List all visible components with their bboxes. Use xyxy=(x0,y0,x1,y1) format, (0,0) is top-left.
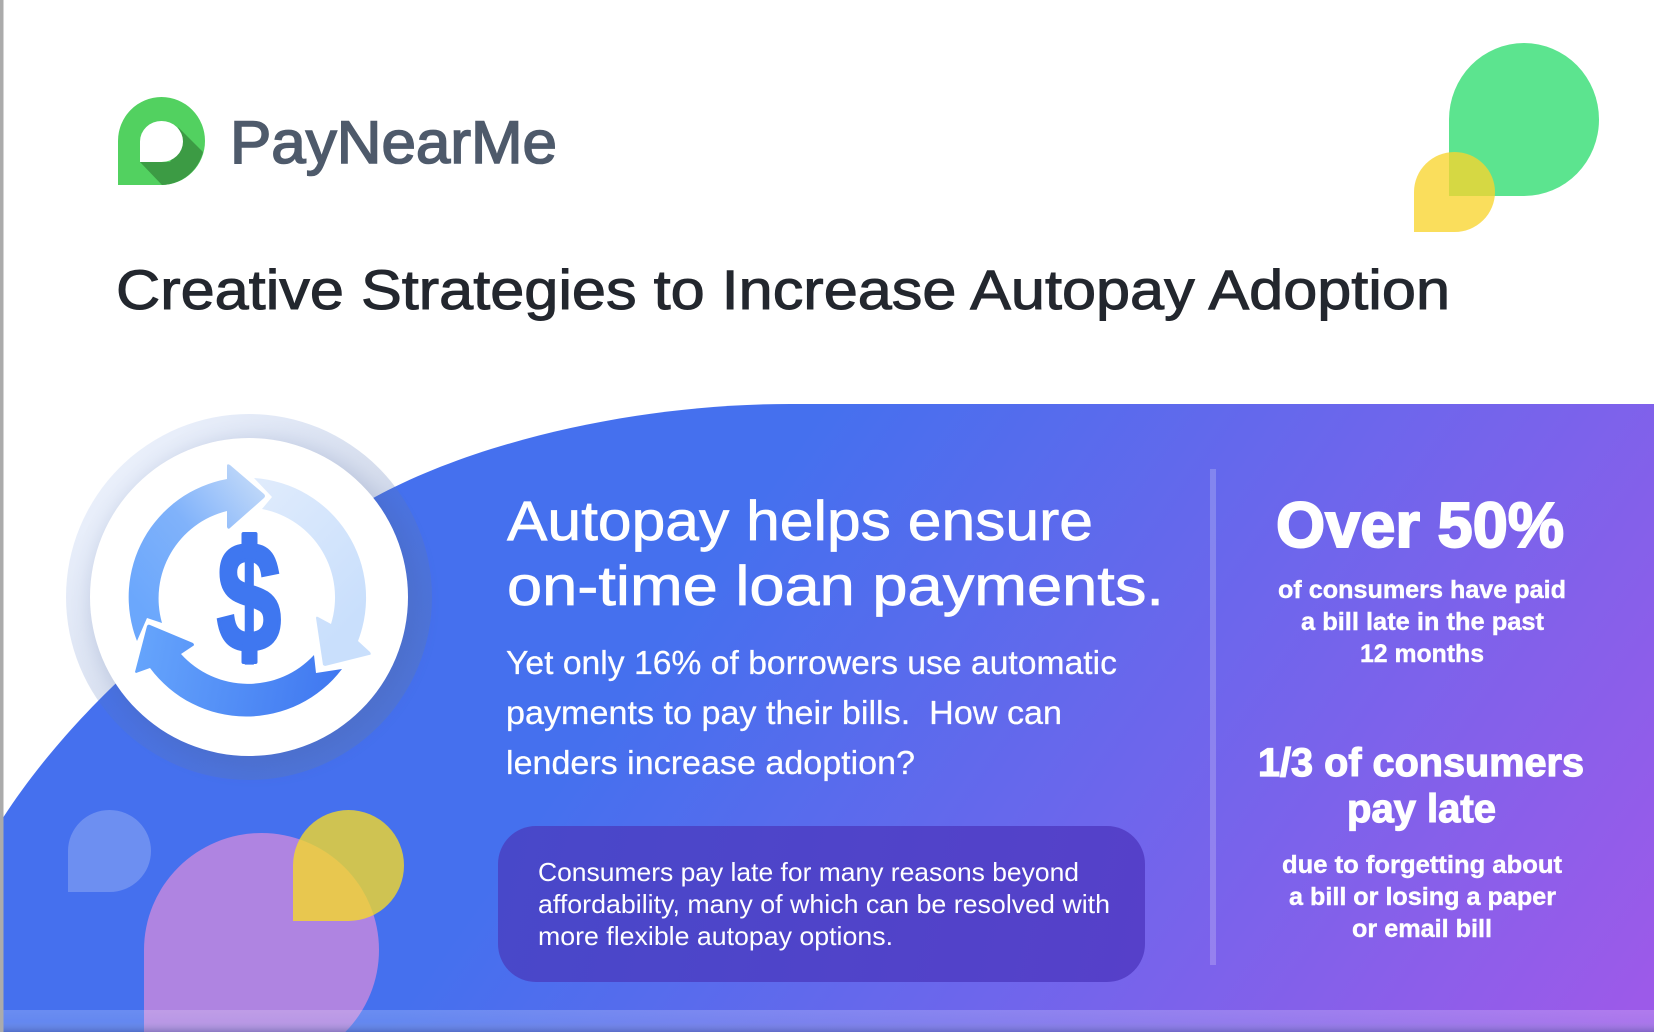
text block: intro paragraph: Yet only 16% of borrowers use automatic xyxy=(506,645,1117,682)
divider xyxy=(1210,469,1216,965)
stat: one third of consumers: pay late xyxy=(1347,787,1496,831)
panel: gradient background xyxy=(4,404,1654,1032)
stat: one third of consumers: a bill or losing a paper xyxy=(1289,883,1556,911)
decoration: lower left speech bubbles xyxy=(68,810,404,1032)
heading: autopay helps xyxy=(507,489,1164,617)
callout: reasons for late payment: Consumers pay late for many reasons beyond xyxy=(538,857,1079,887)
callout: reasons for late payment: affordability, many of which can be resolved with xyxy=(538,889,1110,919)
stat: one third of consumers: or email bill xyxy=(1352,915,1492,943)
decoration: green and yellow speech bubbles xyxy=(1414,43,1599,232)
callout: reasons for late payment xyxy=(498,826,1145,982)
stat: over 50 percent: Over 50% xyxy=(1276,489,1564,561)
title: Creative Strategies to Increase Autopay Adoption xyxy=(116,258,1450,321)
bottom strip xyxy=(4,1010,1654,1032)
icon: PayNearMe location mark xyxy=(118,97,205,185)
icon: autopay cycle badge xyxy=(66,414,432,780)
logo wordmark: PayNearMe xyxy=(230,109,557,176)
stat: over 50 percent: 12 months xyxy=(1360,640,1484,668)
icon: dollar sign: $ xyxy=(217,511,281,685)
stat: over 50 percent xyxy=(1276,489,1566,668)
arrow: right xyxy=(254,478,371,666)
stat: one third of consumers: due to forgetting about xyxy=(1282,851,1563,879)
callout: reasons for late payment: more flexible autopay options. xyxy=(538,921,893,951)
stat: one third of consumers: 1/3 of consumers xyxy=(1258,741,1584,785)
stat: one third of consumers xyxy=(1258,741,1584,943)
text block: intro paragraph: payments to pay their bills. How can xyxy=(506,695,1062,732)
stat: over 50 percent: a bill late in the past xyxy=(1301,608,1545,636)
page edge bar xyxy=(0,0,4,1032)
logo: PayNearMe xyxy=(118,97,557,185)
arrow: bottom xyxy=(135,625,342,717)
heading: autopay helps: on-time loan payments. xyxy=(507,554,1164,617)
arrow: top left xyxy=(129,464,265,641)
stat: over 50 percent: of consumers have paid xyxy=(1278,576,1566,604)
text block: intro paragraph: lenders increase adoption? xyxy=(506,745,915,782)
text block: intro paragraph xyxy=(506,645,1117,782)
heading: autopay helps: Autopay helps ensure xyxy=(507,489,1093,552)
